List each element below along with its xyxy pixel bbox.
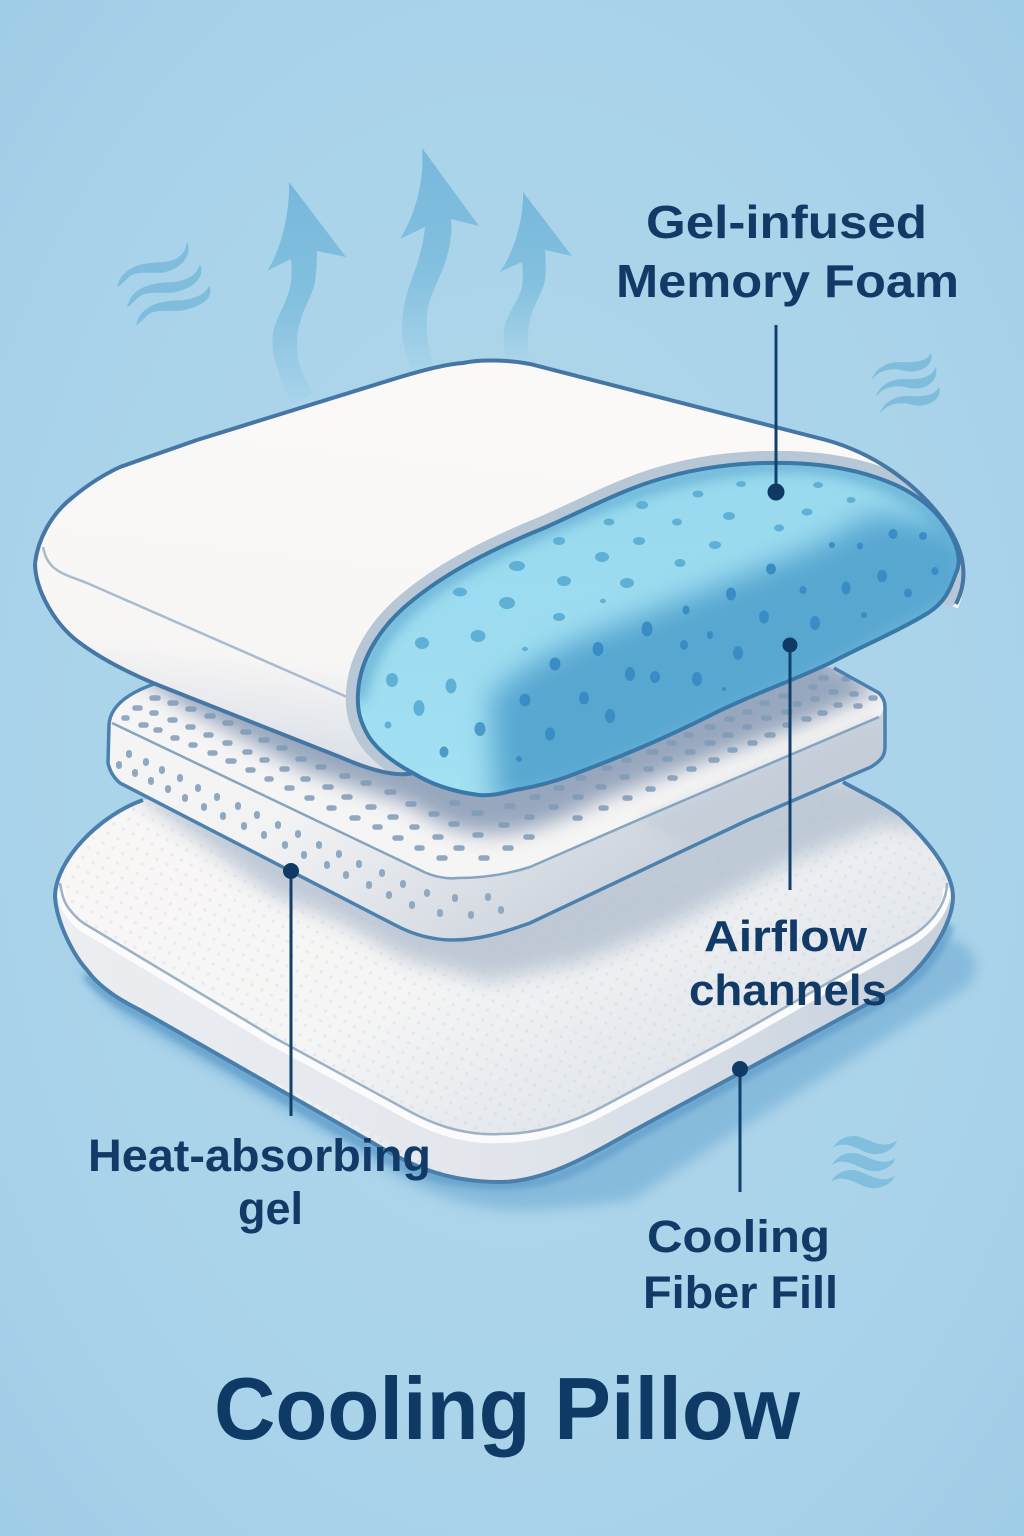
label: gel-infused memory foam <box>616 196 959 307</box>
side perforations <box>119 753 501 916</box>
cover seam <box>43 547 347 697</box>
label: airflow channels <box>689 912 887 1015</box>
top surface perforations <box>124 678 875 858</box>
label: gel-infused memory foam: Memory Foam <box>616 255 959 307</box>
airflow arrows <box>267 148 572 405</box>
label: cooling fiber fill <box>643 1211 838 1318</box>
leader: cooling fiber fill <box>732 1061 748 1192</box>
foam pores: light top face <box>384 481 856 728</box>
foam lip <box>358 463 959 795</box>
title: Cooling Pillow <box>214 1359 801 1458</box>
icon: air waves bottom right <box>831 1136 897 1188</box>
infographic canvas <box>33 148 978 1458</box>
floor shadow <box>80 925 976 1210</box>
panel: gel-infused memory foam <box>358 463 975 810</box>
label: airflow channels: Airflow <box>704 912 868 961</box>
label: cooling fiber fill: Fiber Fill <box>643 1267 838 1318</box>
label: heat-absorbing gel <box>88 1130 431 1234</box>
label: heat-absorbing gel: gel <box>238 1183 303 1234</box>
pillow side below piping <box>57 886 950 1179</box>
label: airflow channels: channels <box>689 966 887 1015</box>
leader: heat-absorbing gel <box>283 863 299 1116</box>
label: gel-infused memory foam: Gel-infused <box>646 196 927 248</box>
leader: airflow channels <box>782 638 798 890</box>
leader: gel-infused memory foam <box>768 325 784 500</box>
icon: air waves top right <box>872 353 940 414</box>
arrow: left <box>267 182 346 405</box>
panel: top pillow with cover <box>35 360 964 795</box>
foam pores: shaded front face <box>440 529 938 762</box>
piping seam <box>60 888 947 1139</box>
panel: middle perforated gel layer <box>106 666 887 942</box>
label: cooling fiber fill: Cooling <box>647 1211 830 1262</box>
top edge seam <box>112 717 879 878</box>
panel: bottom pillow cooling fiber fill <box>53 780 955 1184</box>
arrow: middle <box>400 148 479 372</box>
icon: air waves top left <box>118 243 210 324</box>
label: heat-absorbing gel: Heat-absorbing <box>88 1130 431 1181</box>
arrow: right <box>500 192 572 360</box>
